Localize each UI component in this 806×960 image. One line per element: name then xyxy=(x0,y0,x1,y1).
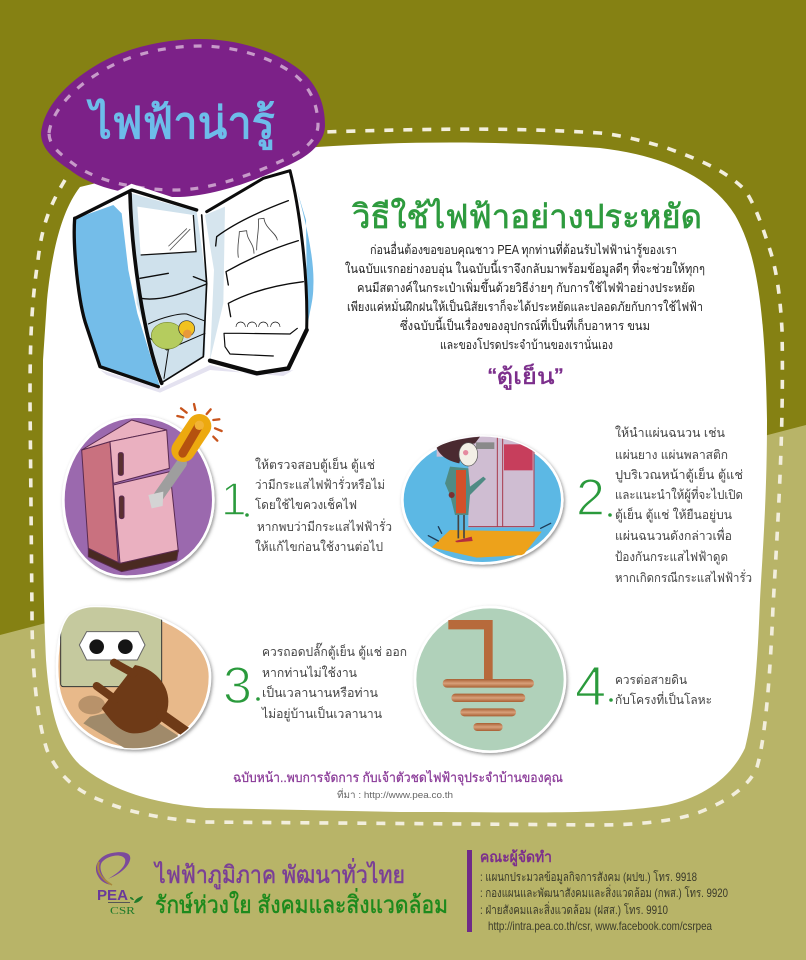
sparks xyxy=(177,404,222,441)
person xyxy=(437,437,494,542)
fridge white halo and shadow xyxy=(72,167,317,388)
fridge behind person xyxy=(468,433,534,527)
title badge xyxy=(41,39,325,197)
floor shadow xyxy=(84,713,178,748)
intro text block: เพียงแค่หมั่นฝึกฝนให้เป็นนิสัยเราก็จะได้ประหยัดและปลอดภัยกับการใช้ไฟฟ้า xyxy=(347,298,703,314)
socket face xyxy=(79,632,145,660)
step 1 number: 1 xyxy=(221,473,247,525)
step 2 number: 2 xyxy=(576,469,605,527)
badge: purple blob xyxy=(41,39,325,197)
fridge black outlines xyxy=(74,190,207,387)
source: ที่มา : http://www.pea.co.th xyxy=(337,788,453,801)
step 1 text xyxy=(255,457,392,554)
fridge body interior xyxy=(132,193,207,382)
step 3 text: ไม่อยู่บ้านเป็นเวลานาน xyxy=(261,706,382,722)
logo leaf xyxy=(130,896,143,903)
screwdriver xyxy=(148,421,204,508)
step 4 text xyxy=(615,673,712,707)
step 3 text: เป็นเวลานานหรือท่าน xyxy=(262,685,378,700)
step 1 text: หากพบว่ามีกระแสไฟฟ้ารั่ว xyxy=(257,518,392,534)
step 3 text: หากท่านไม่ใช้งาน xyxy=(262,666,357,680)
step 1 icon: fridge and screwdriver xyxy=(63,404,222,577)
step 4 text: กับโครงที่เป็นโลหะ xyxy=(615,691,712,707)
intro text block: และของโปรดประจำบ้านของเรานั่นเอง xyxy=(440,336,613,352)
PEA CSR logo xyxy=(96,852,143,917)
title: ไฟฟ้าน่ารู้ xyxy=(87,98,275,150)
step 1 text: โดยใช้ไขควงเช็คไฟ xyxy=(255,497,357,512)
step 2 text xyxy=(615,426,752,585)
logo CSR: CSR xyxy=(110,906,135,917)
step 1 text: ให้ตรวจสอบตู้เย็น ตู้แช่ xyxy=(255,457,375,473)
step 2 icon: person on insulating mat xyxy=(402,433,562,563)
logo swoosh xyxy=(96,852,130,885)
icon disc xyxy=(63,417,213,577)
credits list: http://intra.pea.co.th/csr, www.facebook.com/csrpea xyxy=(488,919,712,933)
credits list: : แผนกประมวลข้อมูลกิจการสังคม (ผปข.) โทร. 9918 xyxy=(480,870,697,885)
credits list: : ฝ่ายสังคมและสิ่งแวดล้อม (ฝสส.) โทร. 9910 xyxy=(480,901,668,917)
step 4 number: 4 xyxy=(575,654,606,717)
dashed stitching around panel xyxy=(30,129,782,825)
illustration: open refrigerator xyxy=(72,167,317,393)
slogan line 1: ไฟฟ้าภูมิภาค พัฒนาทั่วไทย xyxy=(153,858,405,890)
intro text block: ในฉบับแรกอย่างอบอุ่น ในฉบับนี้เราจึงกลับมาพร้อมข้อมูลดีๆ ที่จะช่วยให้ทุกๆ xyxy=(345,259,705,277)
credits list xyxy=(480,870,728,933)
step 1 text: ว่ามีกระแสไฟฟ้ารั่วหรือไม่ xyxy=(255,476,385,492)
step 3 text xyxy=(261,642,407,722)
logo wordmark: PEA xyxy=(97,887,128,904)
step 4 text: ควรต่อสายดิน xyxy=(615,673,687,687)
wall socket plate xyxy=(61,603,162,687)
step 3 number: 3 xyxy=(223,657,252,715)
credits list: : กองแผนและพัฒนาสังคมและสิ่งแวดล้อม (กพส.) โทร. 9920 xyxy=(480,884,728,900)
intro text block: ซึ่งฉบับนี้เป็นเรื่องของอุปกรณ์ที่เป็นที่เก็บอาหาร ขนม xyxy=(400,316,650,334)
credits heading: คณะผู้จัดทำ xyxy=(480,849,552,867)
step 2 text: ให้นำแผ่นฉนวน เช่น xyxy=(615,426,725,440)
step 2 text: ปูบริเวณหน้าตู้เย็น ตู้แช่ xyxy=(615,467,743,483)
credits vertical bar xyxy=(467,850,472,932)
slogan line 2: รักษ์ห่วงใย สังคมและสิ่งแวดล้อม xyxy=(155,888,448,919)
next issue teaser: ฉบับหน้า..พบการจัดการ กับเจ้าตัวชดไฟฟ้าจุประจำบ้านของคุณ xyxy=(233,770,563,786)
copper ground symbol xyxy=(443,620,534,731)
step 3 text: ควรถอดปลั๊กตู้เย็น ตู้แช่ ออก xyxy=(262,642,407,660)
step 2 text: ตู้เย็น ตู้แช่ ให้ยืนอยู่บน xyxy=(615,507,732,523)
right door outlines and shelves xyxy=(207,171,307,373)
icon disc xyxy=(57,607,210,748)
step 3 icon: plug and socket xyxy=(57,603,210,753)
intro text block: คนมีสตางค์ในกระเป๋าเพิ่มขึ้นด้วยวิธีง่ายๆ กับการใช้ไฟฟ้าอย่างประหยัด xyxy=(357,278,695,295)
fruit xyxy=(151,322,183,349)
icon disc xyxy=(415,607,565,752)
panel: white content area xyxy=(43,143,767,812)
step 2 text: แผ่นยาง แผ่นพลาสติก xyxy=(615,448,728,462)
step 2 text: หากเกิดกรณีกระแสไฟฟ้ารั่ว xyxy=(615,569,752,585)
icon disc xyxy=(402,437,562,563)
step 4 icon: ground symbol xyxy=(415,607,565,752)
subject heading: “ตู้เย็น” xyxy=(488,362,563,390)
logo rule xyxy=(108,902,130,903)
background: light olive lower area xyxy=(0,425,806,960)
intro text block: ก่อนอื่นต้องขอขอบคุณชาว PEA ทุกท่านที่ต้อนรับไฟฟ้าน่ารู้ของเรา xyxy=(370,241,677,258)
intro text block xyxy=(345,241,705,352)
credits block xyxy=(480,849,728,933)
left door blue panel xyxy=(75,205,160,387)
plug xyxy=(102,665,168,733)
step 2 text: และแนะนำให้ผู้ที่จะไปเปิด xyxy=(615,486,743,503)
right door xyxy=(205,173,312,373)
step 2 text: ป้องกันกระแสไฟฟ้าดูด xyxy=(615,550,728,565)
badge: dashed outline xyxy=(49,46,318,190)
mat marks xyxy=(428,523,551,541)
heading: วิธีใช้ไฟฟ้าอย่างประหยัด xyxy=(352,198,702,235)
step 2 text: แผ่นฉนวนดังกล่าวเพื่อ xyxy=(615,527,732,543)
step 1 text: ให้แก้ไขก่อนใช้งานต่อไป xyxy=(255,540,383,554)
freezer compartment xyxy=(137,207,196,255)
orange mat xyxy=(432,530,542,558)
pink fridge xyxy=(82,420,178,572)
